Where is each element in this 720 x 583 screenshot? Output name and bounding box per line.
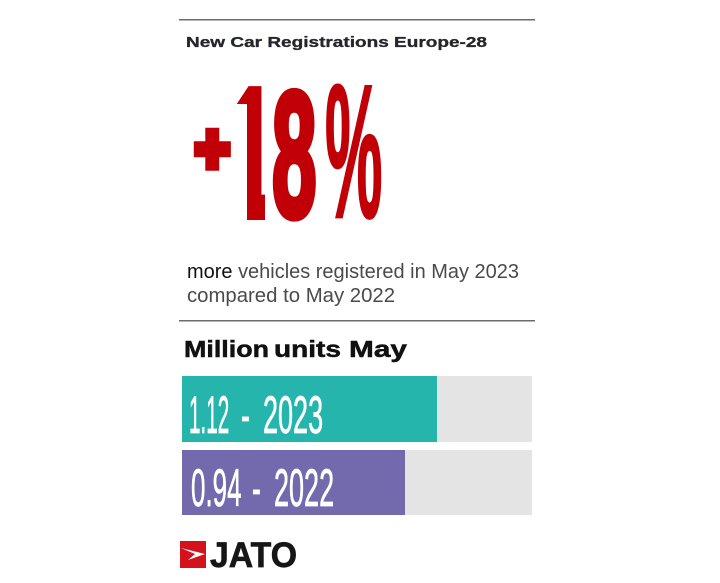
subheading: million units may: May bbox=[349, 336, 407, 362]
description text bbox=[187, 261, 519, 307]
bar chart bbox=[182, 376, 532, 517]
bar label 2022: 0.94 bbox=[191, 458, 242, 517]
bar label 2023 bbox=[189, 385, 323, 445]
bar track 2022 bbox=[182, 450, 532, 515]
bar label 2022: 2022 bbox=[274, 458, 334, 517]
bar label 2022 bbox=[191, 458, 334, 517]
subheading: million units may: units bbox=[274, 336, 341, 362]
bar label 2022: - bbox=[252, 458, 261, 517]
number 18: 1 bbox=[230, 52, 274, 258]
bar label 2023: 1.12 bbox=[189, 386, 229, 445]
bar track 2023 bbox=[182, 376, 532, 442]
number 18: 8 bbox=[272, 56, 317, 255]
bar label 2023: 2023 bbox=[263, 385, 323, 444]
bar 2023 bbox=[182, 376, 437, 442]
bar label 2023: - bbox=[241, 385, 250, 444]
line 1: more vehicles registered in May 2023 bbox=[187, 261, 519, 283]
line 2: compared to May 2022 bbox=[187, 285, 395, 307]
subheading: million units may: Million bbox=[184, 336, 269, 362]
percent sign: % bbox=[325, 47, 382, 259]
logo: JATO bbox=[180, 536, 297, 575]
heading: new car registrations: New Car Registrations Europe-28 bbox=[186, 35, 487, 51]
logo mark bbox=[180, 541, 206, 568]
logo wordmark: JATO bbox=[210, 536, 297, 575]
bar 2022 bbox=[182, 450, 405, 515]
infographic bbox=[179, 19, 535, 568]
plus sign: + bbox=[195, 110, 230, 187]
big stat: +18% bbox=[194, 84, 382, 222]
number 18 bbox=[236, 86, 316, 222]
